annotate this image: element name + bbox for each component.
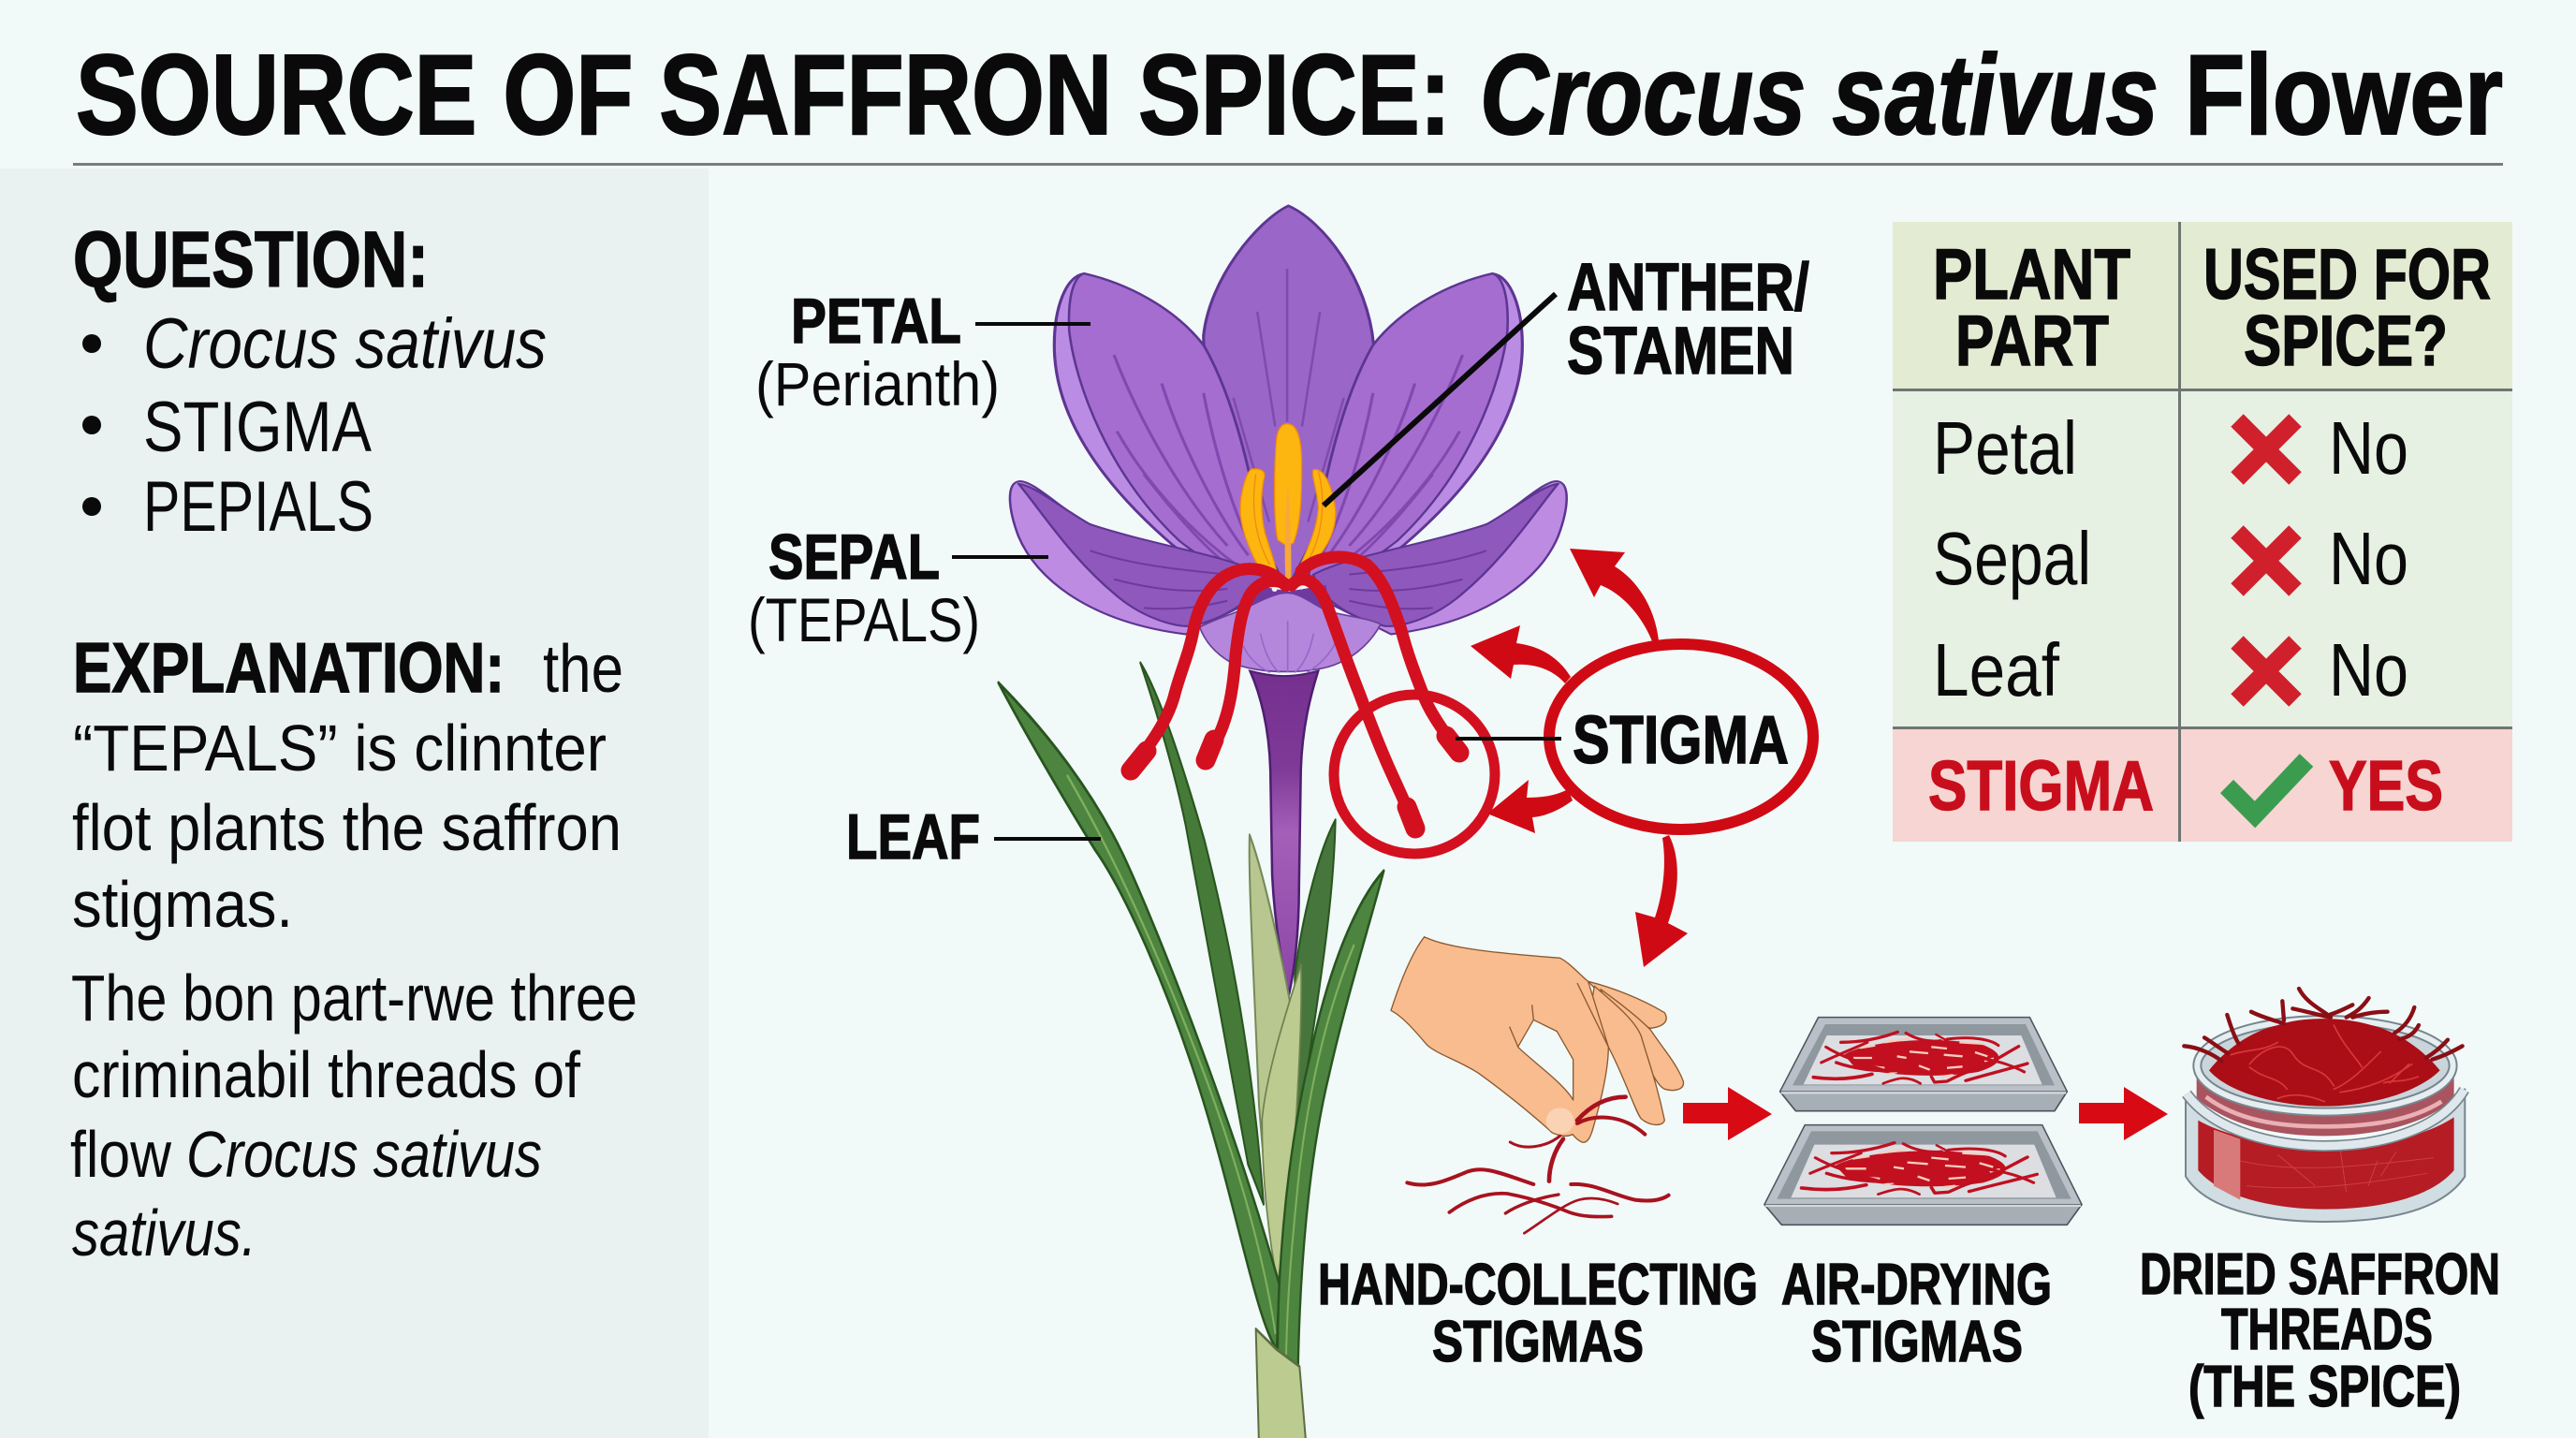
question block: PEPIALS [143, 467, 373, 547]
row: sepal: No [2329, 517, 2408, 600]
label: hand-collecting stigmas: HAND-COLLECTING [1318, 1253, 1758, 1317]
label: leaf [846, 801, 1101, 873]
table header: PLANT [1933, 235, 2130, 315]
front cup petal [1200, 593, 1381, 672]
leaf blades and sheath [999, 682, 1383, 1438]
question block [73, 215, 547, 547]
left petal [1054, 273, 1269, 584]
label: air-drying stigmas: STIGMAS [1811, 1310, 2023, 1374]
stigma callout [1334, 644, 1813, 854]
leaves behind the stem [1140, 663, 1336, 1204]
explanation block [70, 628, 637, 1269]
label: leaf: LEAF [846, 801, 980, 873]
arrow: to upper right sepal [1570, 549, 1659, 641]
explanation block: The bon part-rwe three [71, 961, 637, 1034]
label: petal: PETAL [791, 286, 961, 357]
row: stigma: YES [2329, 746, 2443, 825]
row: leaf: No [2329, 628, 2408, 712]
arrow: to circled stigma [1487, 780, 1573, 833]
explanation block: flot plants the saffron [72, 791, 622, 864]
icon: upper drying tray [1780, 1018, 2067, 1111]
label: air-drying stigmas [1781, 1253, 2052, 1374]
flower stem [1251, 671, 1318, 995]
flower center: cup and anthers [1200, 424, 1381, 672]
table header: PART [1955, 301, 2109, 381]
table header: SPICE? [2244, 301, 2448, 381]
table header [1933, 235, 2491, 381]
label: dried saffron threads: (THE SPICE) [2188, 1355, 2461, 1419]
right sepal [1313, 481, 1567, 634]
arrow: to left [1471, 625, 1571, 683]
icon: jar of dried saffron [2184, 989, 2465, 1222]
question block: QUESTION: [73, 215, 429, 303]
row: stigma: STIGMA [1928, 746, 2154, 825]
label: dried saffron threads: THREADS [2221, 1298, 2433, 1362]
row: leaf: Leaf [1933, 628, 2060, 712]
stigma callout: STIGMA [1573, 703, 1789, 778]
left sepal [1010, 481, 1264, 634]
table: plant part used for spice [1893, 222, 2512, 842]
label: sepal: SEPAL [768, 521, 940, 593]
label: petal: (Perianth) [755, 349, 1000, 418]
table header: USED FOR [2203, 235, 2491, 315]
label: sepal: (TEPALS) [748, 585, 980, 654]
explanation block: sativus. [72, 1196, 256, 1269]
title: Crocus sativus [1480, 31, 2159, 158]
label: petal [755, 286, 1090, 418]
crocus flower [1010, 206, 1567, 634]
right petal [1308, 273, 1522, 584]
explanation block: flow [70, 1118, 171, 1191]
title: SOURCE OF SAFFRON SPICE: [76, 31, 1451, 158]
row: leaf [1933, 628, 2408, 712]
label: hand-collecting stigmas: STIGMAS [1432, 1310, 1644, 1374]
question block: Crocus sativus [143, 304, 547, 384]
label: hand-collecting stigmas [1318, 1253, 1758, 1374]
stigma threads [1129, 557, 1460, 829]
arrow: trays to jar [2079, 1087, 2168, 1140]
row: petal: No [2329, 406, 2408, 490]
label: anther and stamen [1324, 251, 1809, 506]
explanation block: Crocus sativus [186, 1118, 542, 1191]
label: anther and stamen: ANTHER/ [1567, 251, 1809, 325]
row: sepal [1933, 517, 2408, 600]
row: stigma [1928, 746, 2443, 825]
explanation block: “TEPALS” is clinnter [73, 712, 607, 785]
stigma threads at fingertips and on ground [1407, 1097, 1669, 1233]
title: Flower [2185, 31, 2503, 158]
arrow: hand to trays [1683, 1087, 1772, 1140]
row: petal [1933, 406, 2408, 490]
explanation block: EXPLANATION: [73, 628, 505, 707]
anthers [1240, 424, 1336, 587]
label: anther and stamen: STAMEN [1567, 315, 1794, 389]
icon: hand collecting [1391, 937, 1683, 1233]
question block: STIGMA [143, 388, 372, 467]
title [76, 31, 2503, 158]
label: sepal [748, 521, 1048, 654]
explanation block: stigmas. [72, 868, 293, 941]
row: sepal: Sepal [1933, 517, 2091, 600]
row: petal: Petal [1933, 406, 2077, 490]
label: air-drying stigmas: AIR-DRYING [1781, 1253, 2052, 1317]
arrow: down to hand [1635, 835, 1688, 967]
explanation block: the [543, 632, 623, 707]
explanation block: criminabil threads of [72, 1038, 580, 1111]
label: dried saffron threads [2140, 1242, 2500, 1419]
center petal [1204, 206, 1374, 589]
panel: question and explanation background [0, 169, 709, 1438]
icon: lower drying tray [1764, 1125, 2082, 1225]
